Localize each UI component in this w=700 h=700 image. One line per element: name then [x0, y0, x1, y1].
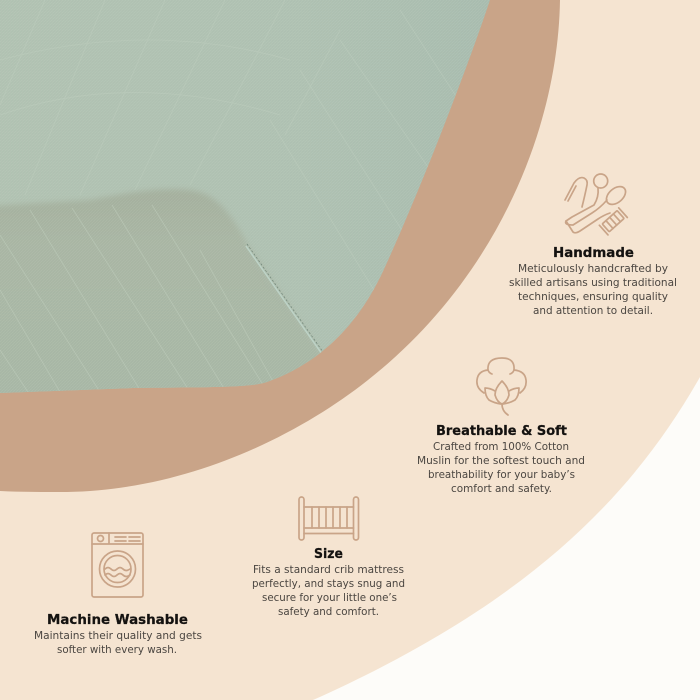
description: Meticulously handcrafted by [518, 264, 668, 275]
description: Maintains their quality and gets [34, 631, 202, 642]
description: Muslin for the softest touch and [417, 456, 585, 467]
description: comfort and safety. [451, 484, 552, 495]
muslin weave texture [2, 192, 225, 220]
muslin grid lines on top of sheet [336, 10, 456, 289]
photo: sage green muslin crib sheet [0, 0, 500, 410]
sheet seam [246, 244, 323, 354]
muslin grid lines on side panel [0, 205, 275, 392]
sheet side panel [0, 189, 325, 410]
description: breathability for your baby’s [428, 470, 575, 481]
description: secure for your little one’s [262, 593, 397, 604]
description [417, 442, 585, 495]
description: perfectly, and stays snug and [252, 579, 405, 590]
description: softer with every wash. [57, 645, 177, 656]
description: Fits a standard crib mattress [253, 565, 404, 576]
icon: washing machine [92, 533, 143, 597]
feature: Breathable & Soft [417, 358, 585, 495]
icon: scissors, needle and thread [565, 174, 629, 235]
heading: Size [314, 546, 343, 562]
description: skilled artisans using traditional [509, 278, 677, 289]
feature: Handmade [509, 174, 677, 317]
icon: crib [299, 497, 358, 540]
feature: Size [252, 497, 405, 618]
heading: Handmade [553, 245, 634, 261]
tan curved band [0, 0, 560, 492]
feature: Machine Washable [34, 533, 202, 656]
description [252, 565, 405, 618]
description: Crafted from 100% Cotton [433, 442, 569, 453]
icon: cotton boll [477, 358, 526, 415]
heading: Breathable & Soft [436, 423, 567, 439]
description [509, 264, 677, 317]
description: techniques, ensuring quality [518, 292, 668, 303]
heading: Machine Washable [47, 612, 188, 628]
description: and attention to detail. [533, 306, 653, 317]
description [34, 631, 202, 656]
description: safety and comfort. [278, 607, 379, 618]
